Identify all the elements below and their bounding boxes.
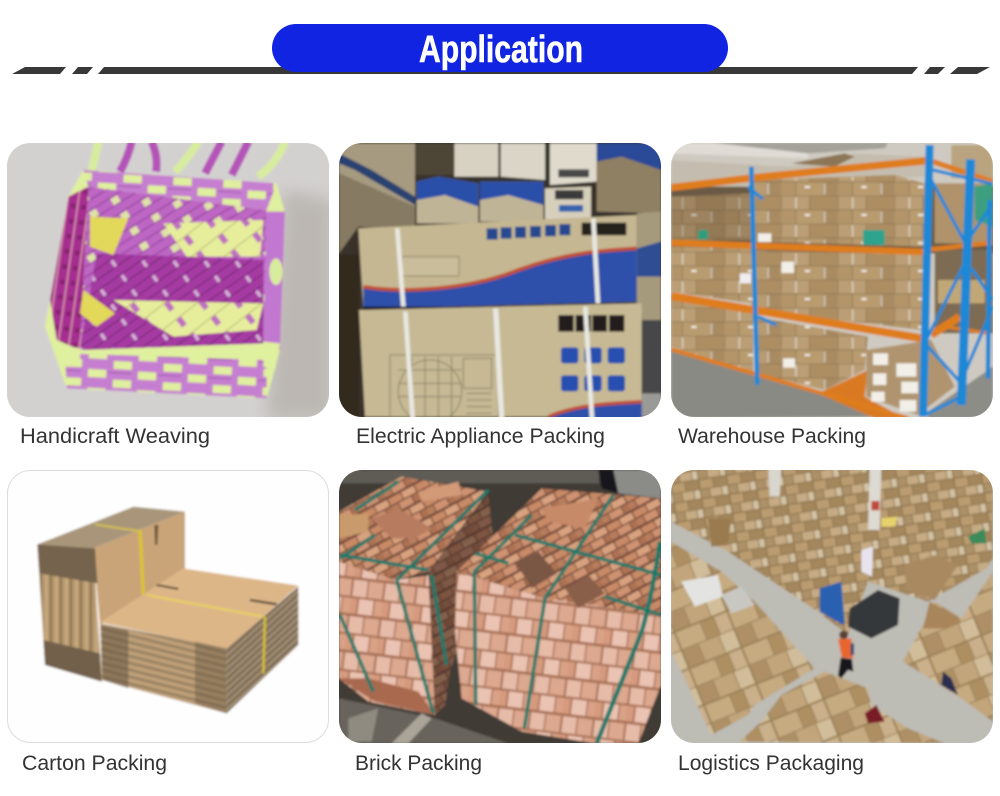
panel: Carton Packing [0,465,340,775]
title: Application [419,29,583,71]
lower appliance carton [359,303,642,423]
black cage cart [848,590,900,638]
panel: Logistics Packaging [668,465,1000,775]
orange shelf beams [671,161,993,418]
horizontal flat cartons [100,568,298,713]
header: title banner [12,24,990,74]
panel: Handicraft Weaving [0,140,340,448]
sign [861,547,873,577]
blue pallet [820,582,845,625]
upright flat cartons [37,507,185,682]
caption: Warehouse Packing [678,425,866,448]
photo: warehouse racks [668,140,1000,420]
caption: Logistics Packaging [678,752,864,775]
caption: Handicraft Weaving [20,425,210,448]
photo: boxed air conditioners [335,140,672,423]
green straps [340,482,661,743]
panel outline [8,470,328,742]
blue title pill [272,24,728,72]
panel: Electric Appliance Packing [335,140,672,448]
photo: woven basket [7,143,329,417]
caption: Electric Appliance Packing [356,425,605,448]
photo: strapped brick pallets [335,465,672,745]
photo: flat carton stacks [36,505,300,714]
caption: Brick Packing [355,752,482,775]
right pallet [455,488,661,743]
blue rack uprights and braces [748,145,993,417]
panel: Brick Packing [335,465,672,775]
panel: Warehouse Packing [668,140,1000,448]
photo: fulfilment centre floor [668,465,1000,745]
left pallet [339,477,493,715]
caption: Carton Packing [22,752,167,775]
stacked cartons [671,175,925,390]
worker [838,631,854,678]
upper appliance carton [358,215,637,308]
dashed bar, left and right [12,67,990,74]
